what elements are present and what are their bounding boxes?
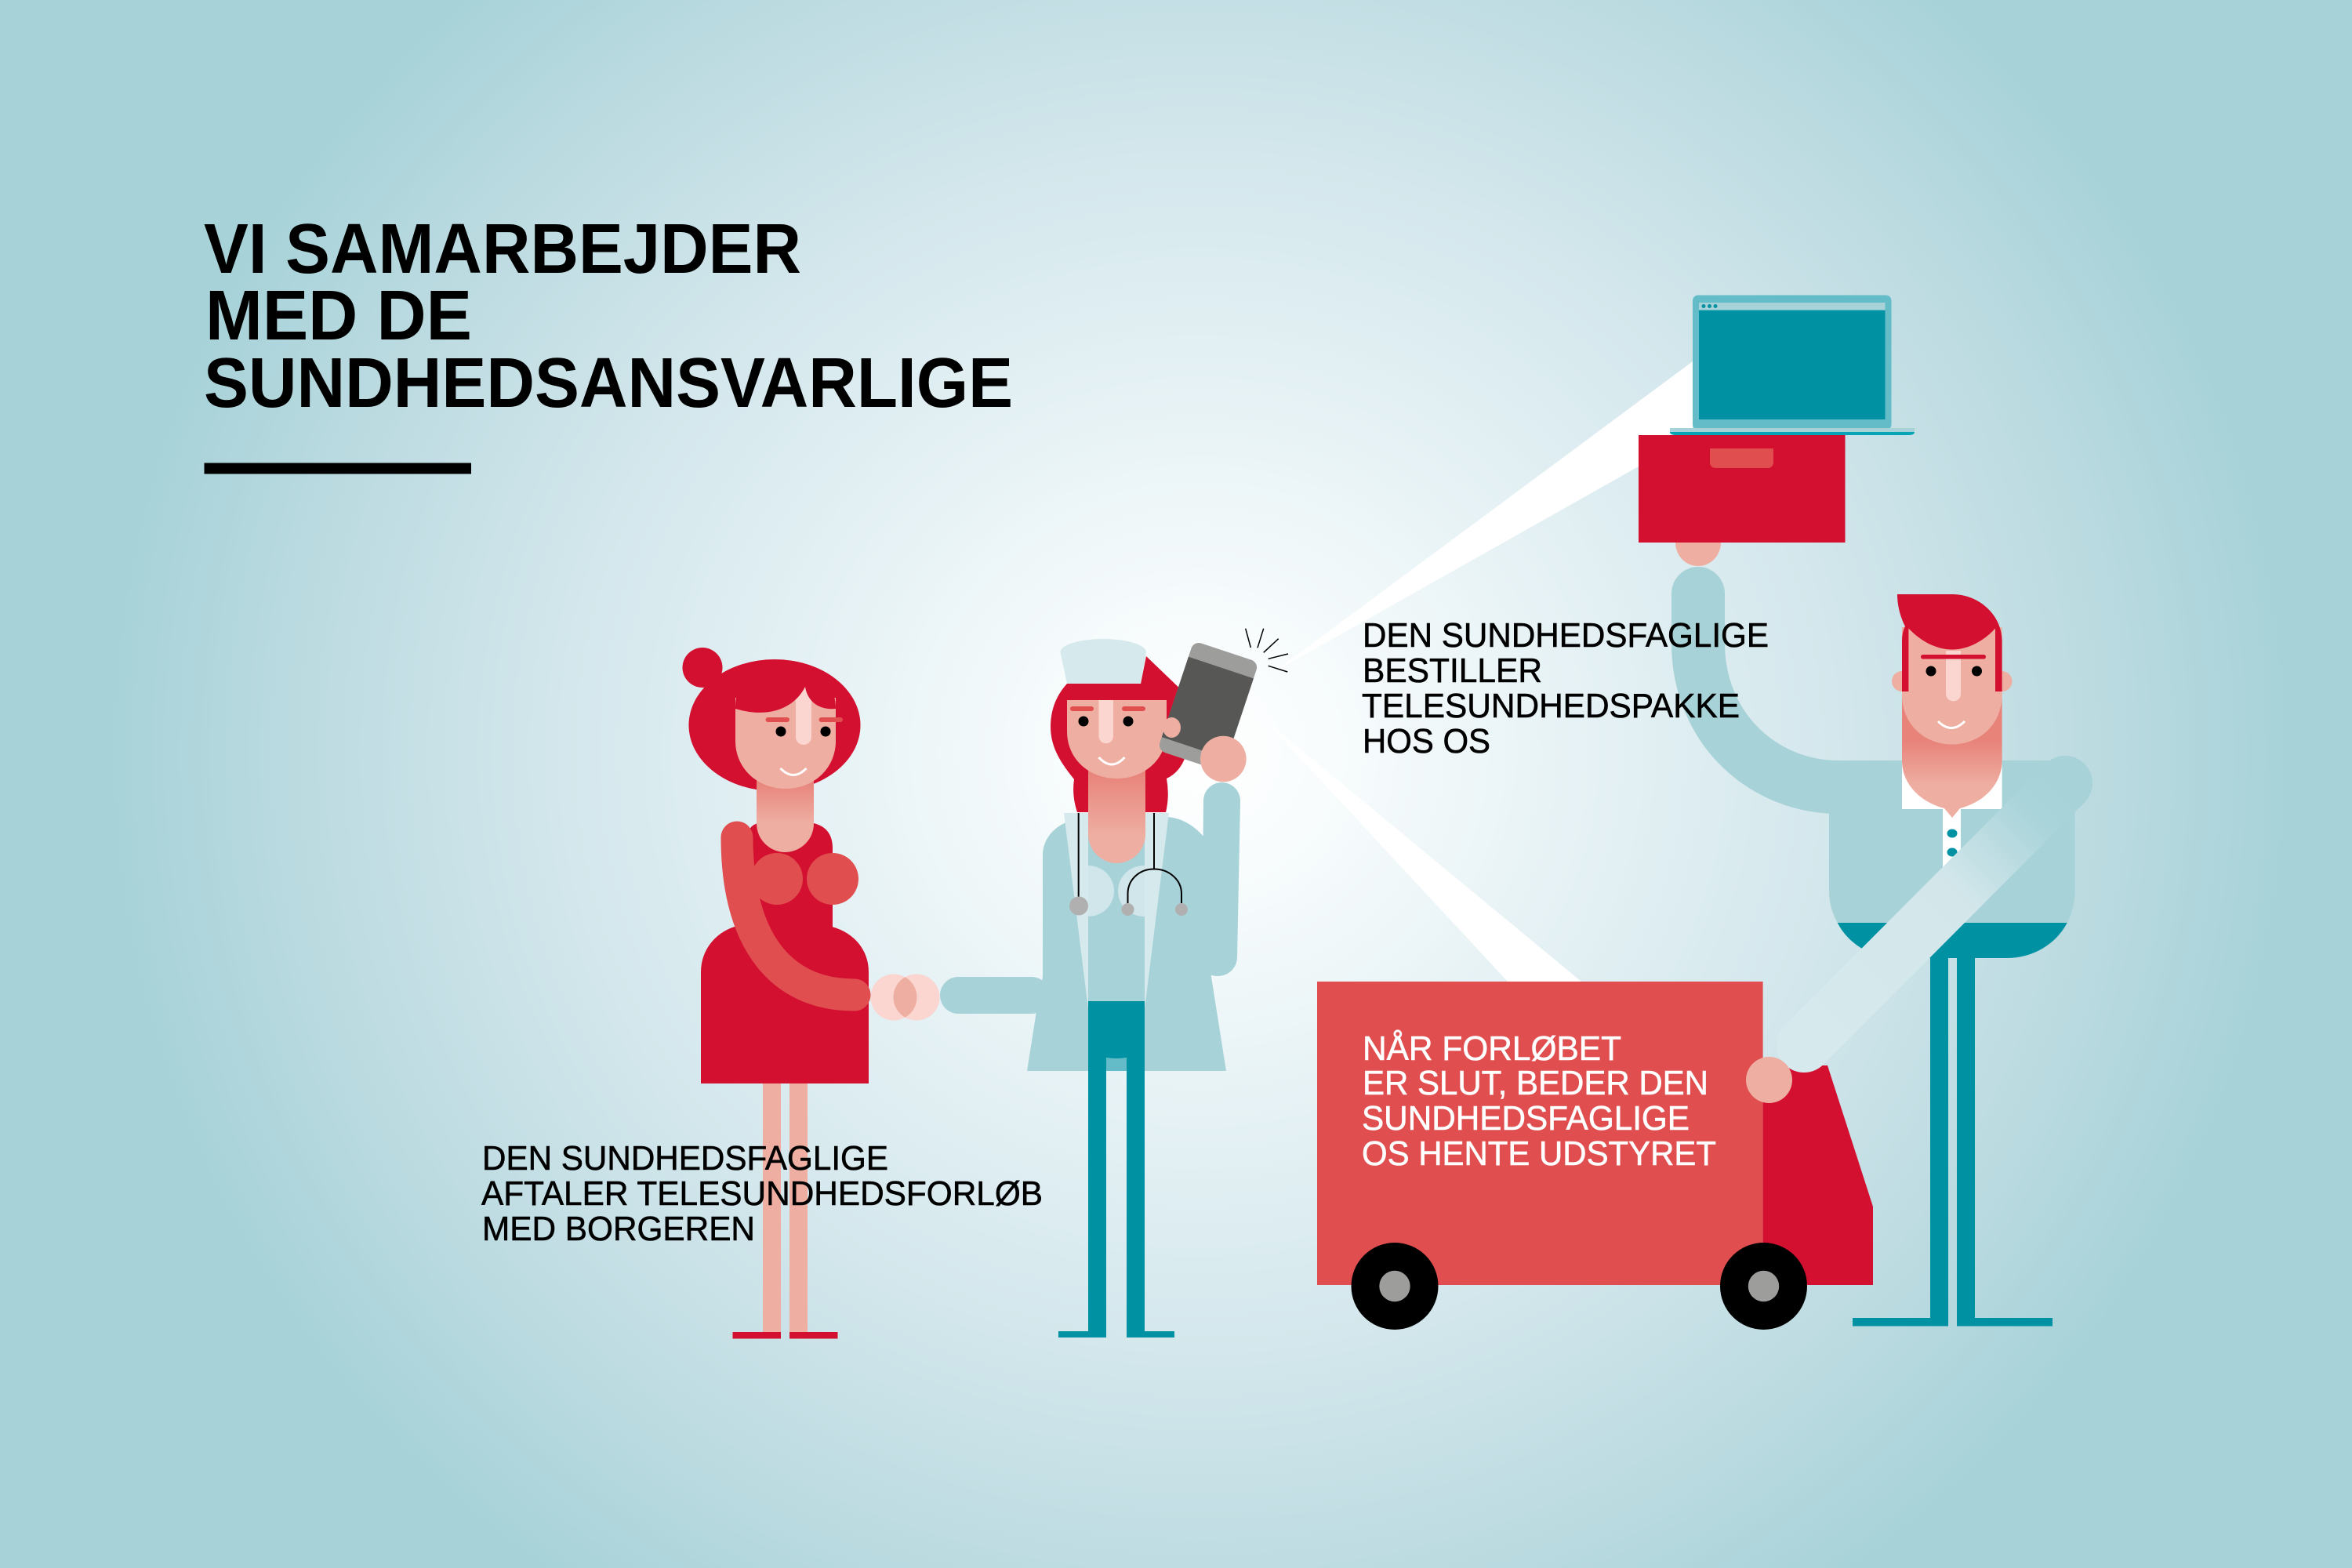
doctor lapels bbox=[1064, 813, 1169, 1009]
woman hair bbox=[682, 648, 861, 791]
doctor trousers bbox=[1058, 1001, 1174, 1338]
woman bust bbox=[751, 853, 858, 905]
text: orders package: TELESUNDHEDSPAKKE bbox=[1362, 687, 1740, 725]
man lowered arm bbox=[1804, 783, 2065, 1045]
woman neck bbox=[757, 776, 814, 852]
text: collect equipment bbox=[1362, 1029, 1716, 1173]
woman arm bbox=[737, 837, 855, 995]
text: orders package bbox=[1362, 616, 1769, 760]
doctor hand bbox=[1200, 736, 1247, 782]
doctor hair bbox=[1051, 656, 1185, 812]
light beam to wagon bbox=[1265, 720, 1581, 982]
title underline bbox=[204, 463, 471, 474]
light beam to laptop bbox=[1274, 361, 1693, 672]
wagon rear wheel bbox=[1720, 1243, 1807, 1330]
wagon cab bbox=[1763, 1065, 1873, 1285]
figure: woman bbox=[682, 648, 869, 1339]
text: collect equipment: OS HENTE UDSTYRET bbox=[1362, 1134, 1716, 1173]
doctor face bbox=[1067, 700, 1167, 779]
text: agreement with citizen: MED BORGEREN bbox=[482, 1210, 755, 1248]
text: orders package: BESTILLER bbox=[1363, 652, 1542, 690]
box bbox=[1639, 435, 1846, 543]
text: orders package: DEN SUNDHEDSFAGLIGE bbox=[1363, 616, 1769, 655]
laptop bbox=[1670, 295, 1915, 435]
doctor chest bbox=[1088, 866, 1145, 916]
woman dress bbox=[701, 823, 869, 1083]
text: agreement with citizen: AFTALER TELESUNDHEDSFORLØB bbox=[481, 1174, 1043, 1213]
phone bbox=[1157, 641, 1259, 771]
man lower hand bbox=[1746, 1057, 1792, 1103]
woman legs and feet bbox=[732, 1082, 837, 1339]
doctor hat bbox=[1060, 639, 1146, 684]
wagon front wheel bbox=[1352, 1243, 1438, 1330]
doctor coat bbox=[940, 782, 1240, 1071]
man legs and feet bbox=[1853, 953, 2053, 1327]
woman face bbox=[735, 661, 843, 789]
man shirt bbox=[1902, 760, 2002, 874]
text: agreement with citizen bbox=[481, 1139, 1043, 1248]
doctor neck bbox=[1088, 771, 1145, 863]
man head bbox=[1892, 594, 2012, 818]
title: SUNDHEDSANSVARLIGE bbox=[204, 344, 1013, 423]
title: VI SAMARBEJDER bbox=[204, 210, 801, 289]
text: orders package: HOS OS bbox=[1363, 722, 1490, 760]
stethoscope bbox=[1069, 813, 1188, 916]
man upper hand bbox=[1675, 543, 1721, 566]
figure: man bbox=[1639, 435, 2074, 1327]
man torso bbox=[1829, 760, 2074, 958]
title: MED DE bbox=[205, 277, 472, 355]
title bbox=[204, 210, 1013, 423]
text: collect equipment: SUNDHEDSFAGLIGE bbox=[1362, 1099, 1690, 1138]
man raised arm bbox=[1698, 593, 1838, 787]
shirt buttons bbox=[1947, 829, 1957, 856]
man waistband bbox=[1838, 923, 2067, 958]
handshake bbox=[870, 974, 939, 1021]
delivery wagon bbox=[1317, 982, 1873, 1330]
text: collect equipment: NÅR FORLØBET bbox=[1363, 1029, 1621, 1068]
text: collect equipment: ER SLUT, BEDER DEN bbox=[1363, 1064, 1708, 1102]
text: agreement with citizen: DEN SUNDHEDSFAGLIGE bbox=[482, 1139, 888, 1178]
doctor ear bbox=[1163, 717, 1181, 738]
figure: doctor bbox=[940, 629, 1288, 1338]
phone ring lines bbox=[1246, 629, 1288, 672]
wagon cargo box bbox=[1317, 982, 1763, 1285]
